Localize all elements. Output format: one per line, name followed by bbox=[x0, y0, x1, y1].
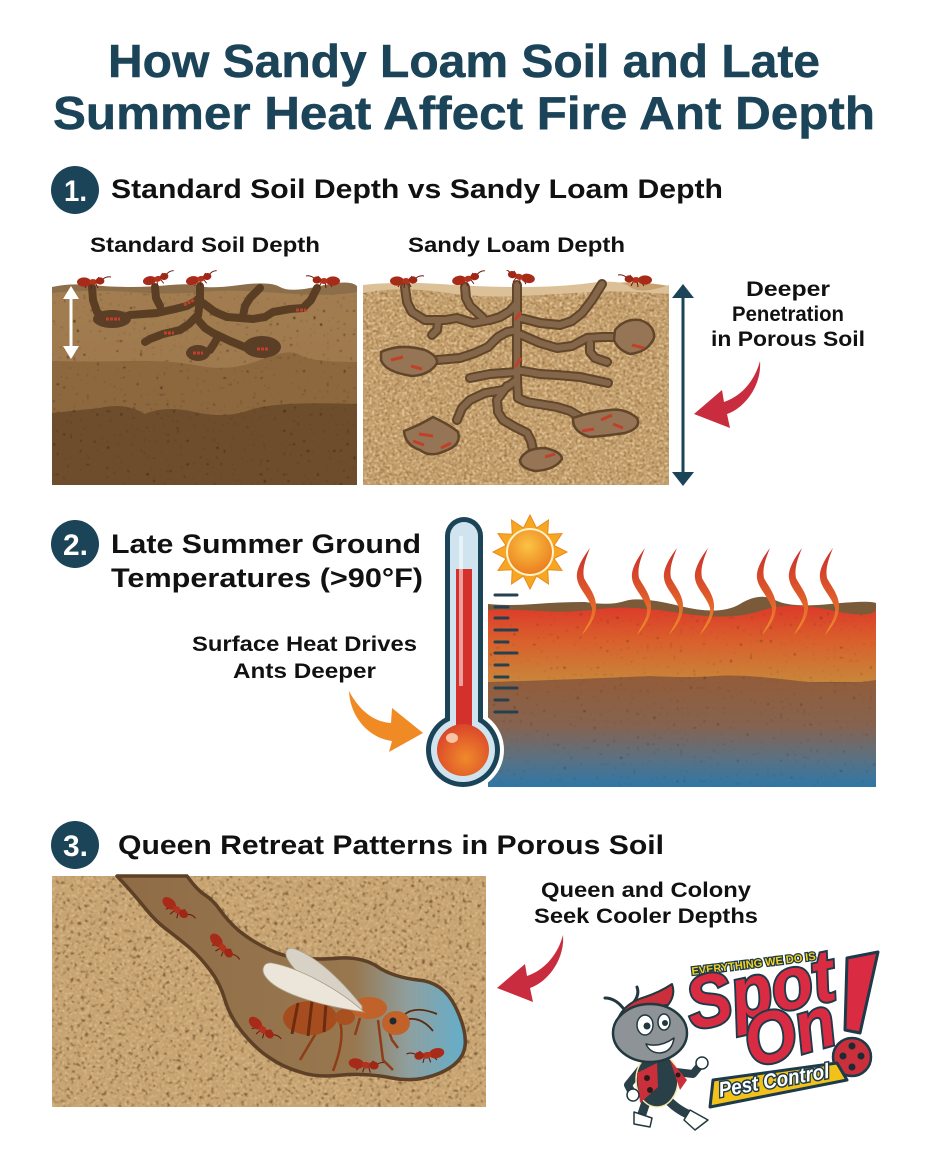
section 1 heading: 1. bbox=[64, 175, 87, 208]
section 2 heading: Late Summer Ground bbox=[111, 529, 421, 559]
panel: ground temperature cross-section bbox=[488, 597, 876, 787]
panel: queen retreat chamber bbox=[52, 876, 486, 1107]
panel label: sandy loam depth: Sandy Loam Depth bbox=[408, 234, 625, 257]
tunnels: standard soil bbox=[92, 286, 317, 361]
panel: sandy loam cross-section bbox=[363, 269, 669, 485]
logo: Spot On Pest Control bbox=[605, 933, 878, 1130]
ladybug ball bbox=[833, 1038, 871, 1076]
callout: surface heat bbox=[192, 633, 417, 683]
surface ants: standard soil bbox=[77, 270, 340, 289]
heat waves bbox=[577, 548, 839, 635]
icon: sun bbox=[493, 515, 567, 589]
section 2 heading: Temperatures (>90°F) bbox=[111, 563, 423, 593]
callout: queen and colony bbox=[534, 879, 758, 928]
wordmark: exclamation bbox=[845, 952, 878, 1033]
section 1 heading: Standard Soil Depth vs Sandy Loam Depth bbox=[111, 174, 723, 204]
callout: surface heat: Ants Deeper bbox=[233, 660, 376, 683]
title: How Sandy Loam Soil and Late bbox=[108, 35, 820, 87]
icon: thermometer bbox=[422, 517, 504, 791]
wordmark: On: On bbox=[734, 981, 845, 1083]
callout: deeper penetration: Penetration bbox=[732, 303, 844, 326]
callout: deeper penetration: Deeper bbox=[746, 278, 830, 301]
title bbox=[53, 35, 875, 139]
pest control banner: Pest Control bbox=[717, 1060, 832, 1102]
section 3 heading: Queen Retreat Patterns in Porous Soil bbox=[118, 830, 664, 860]
title: Summer Heat Affect Fire Ant Depth bbox=[53, 87, 875, 139]
section 3 heading: 3. bbox=[63, 830, 88, 863]
panel label: standard soil depth: Standard Soil Depth bbox=[90, 234, 320, 257]
section 2 heading: 2. bbox=[63, 529, 88, 562]
callout: deeper penetration bbox=[711, 278, 865, 351]
section 3 heading bbox=[51, 821, 664, 869]
queen ant bbox=[263, 948, 437, 1071]
tunnels: sandy loam bbox=[381, 284, 654, 471]
callout: surface heat: Surface Heat Drives bbox=[192, 633, 417, 656]
callout: queen and colony: Queen and Colony bbox=[541, 879, 751, 902]
arrow: to sandy loam bbox=[694, 361, 760, 428]
depth arrow: shallow bbox=[63, 286, 79, 359]
arrow: to queen chamber bbox=[497, 935, 563, 1002]
panel: standard soil cross-section bbox=[52, 270, 357, 485]
temperature scale ticks bbox=[495, 595, 517, 712]
mascot ladybug bbox=[605, 984, 708, 1130]
arrow: to thermometer bbox=[349, 691, 423, 752]
callout: queen and colony: Seek Cooler Depths bbox=[534, 905, 758, 928]
depth arrow: deep bbox=[672, 284, 694, 486]
worker ants bbox=[158, 894, 446, 1076]
section 1 heading bbox=[51, 166, 723, 214]
tunnel and chamber bbox=[117, 876, 465, 1080]
surface ants: sandy loam bbox=[390, 269, 652, 288]
wordmark: Spot: Spot bbox=[678, 933, 845, 1046]
slogan: EVERYTHING WE DO IS bbox=[691, 951, 816, 978]
section 2 heading bbox=[51, 520, 423, 593]
callout: deeper penetration: in Porous Soil bbox=[711, 328, 865, 351]
